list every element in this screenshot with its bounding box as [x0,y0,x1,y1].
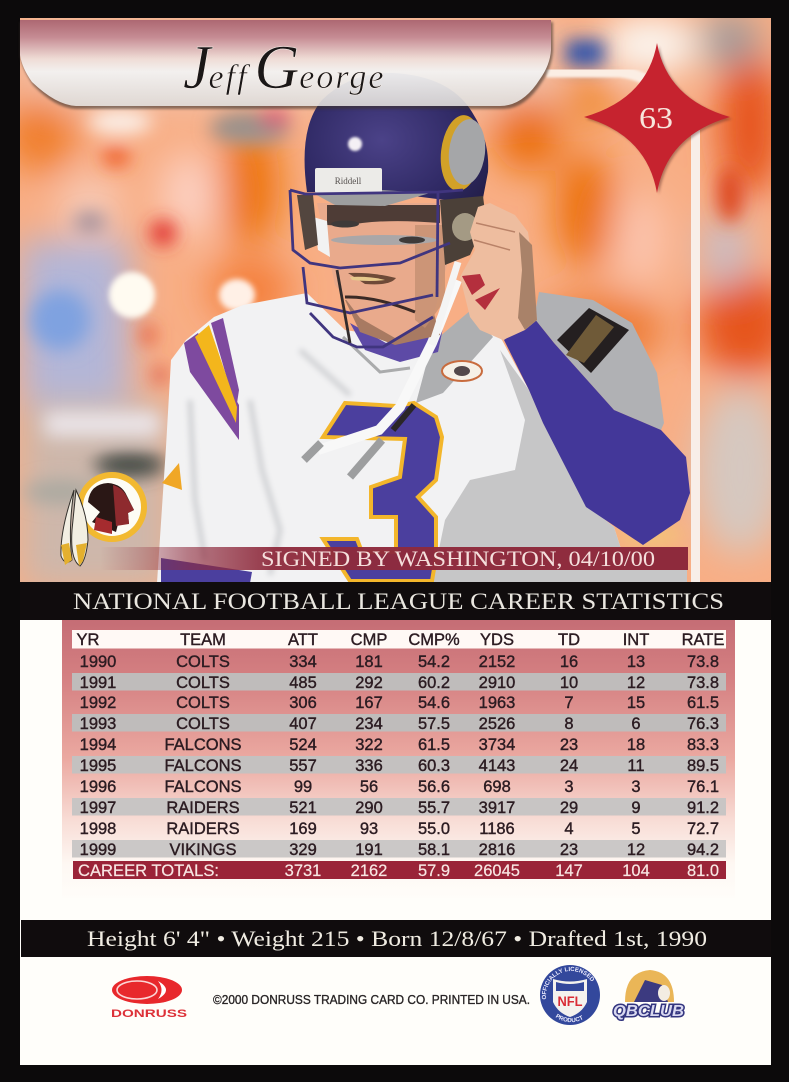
row 1999: 12 [627,841,645,859]
row 1998 [80,820,719,838]
row 1993: 1993 [80,715,116,733]
header band: career statistics: NATIONAL FOOTBALL LEAGUE CAREER STATISTICS [73,589,724,615]
row 1996: FALCONS [164,778,242,796]
row 1991: 60.2 [418,674,450,692]
row 1994: 322 [355,736,383,754]
career totals row: 81.0 [687,862,719,880]
row 1991: 10 [560,674,578,692]
row 1998: 4 [564,820,574,838]
bio band: Height 6' 4" • Weight 215 • Born 12/8/67 • Drafted 1st, 1990 [87,926,707,951]
row 1990: COLTS [176,653,230,671]
table header: TEAM [180,631,226,649]
row 1993: 57.5 [418,715,450,733]
left shoulder stripes [184,333,239,440]
row 1996: 3 [564,778,574,796]
table header: TD [558,631,580,649]
row 1999: 191 [355,841,383,859]
row 1996: 56.6 [418,778,450,796]
row 1993: 76.3 [687,715,719,733]
row 1997: 290 [355,799,383,817]
sleeve stripes, right [557,308,629,373]
row 1994: FALCONS [164,736,242,754]
row 1993: 8 [564,715,574,733]
jersey shaded side [432,350,687,583]
row 1990: 54.2 [418,653,450,671]
row 1995 [72,756,726,775]
row 1990: 16 [560,653,578,671]
row 1997: 29 [560,799,578,817]
row 1996: 3 [631,778,641,796]
row 1991: 292 [355,674,383,692]
row 1996: 99 [294,778,312,796]
row 1990: 13 [627,653,645,671]
row 1994: 524 [289,736,317,754]
table header: ATT [288,631,318,649]
header band: career statistics [20,582,771,620]
face [317,203,447,338]
row 1994: 18 [627,736,645,754]
row 1991: 73.8 [687,674,719,692]
career totals row: 26045 [474,862,520,880]
career totals row: 57.9 [418,862,450,880]
row 1999: 1999 [80,841,116,859]
helmet ear disc [440,115,474,190]
row 1992: 61.5 [687,694,719,712]
row 1995: 557 [289,757,317,775]
row 1997: 91.2 [687,799,719,817]
table header: CMP% [408,631,460,649]
row 1994: 83.3 [687,736,719,754]
row 1996: 1996 [80,778,116,796]
Donruss logo: DONRUSS [111,1008,187,1020]
row 1997: 9 [631,799,641,817]
row 1994: 61.5 [418,736,450,754]
player illustration [157,73,690,583]
row 1991: COLTS [176,674,230,692]
career totals row: 2162 [351,862,387,880]
row 1996: 56 [360,778,378,796]
neck [345,300,440,345]
row 1999: 329 [289,841,317,859]
row 1991: 485 [289,674,317,692]
row 1991: 12 [627,674,645,692]
row 1994: 1994 [80,736,116,754]
jersey torso [157,293,620,582]
face mask [290,190,463,347]
career totals row: 3731 [285,862,321,880]
row 1993: 234 [355,715,383,733]
row 1992 [80,694,719,712]
row 1998: 1998 [80,820,116,838]
row 1992: 306 [289,694,317,712]
row 1998: 93 [360,820,378,838]
row 1991 [72,673,726,692]
row 1997: 55.7 [418,799,450,817]
row 1999: 94.2 [687,841,719,859]
row 1992: 1963 [479,694,515,712]
row 1996 [80,778,719,796]
photo: blurred stadium crowd background [4,14,789,590]
row 1995: 4143 [479,757,515,775]
hand [460,203,537,340]
row 1999: VIKINGS [170,841,236,859]
career totals row [73,861,726,880]
NFL licensed product badge: NFL [558,993,583,1009]
career totals row: CAREER TOTALS: [78,862,219,880]
row 1997: 521 [289,799,317,817]
row 1999: 2816 [479,841,515,859]
collar strap [432,262,458,345]
QB Club logo: QBCLUB [613,1003,684,1020]
red banner: signed by [100,546,688,571]
feathers [72,490,88,566]
row 1998: RAIDERS [166,820,240,838]
row 1992: 7 [564,694,574,712]
row 1992: 1992 [80,694,116,712]
row 1992: 15 [627,694,645,712]
row 1993 [72,714,726,733]
row 1992: COLTS [176,694,230,712]
row 1992: 167 [355,694,383,712]
card number star [584,43,732,194]
row 1995: 1995 [80,757,116,775]
card number star: 63 [639,100,673,135]
table header: CMP [351,631,387,649]
red banner: signed by: SIGNED BY WASHINGTON, 04/10/00 [261,546,655,571]
jersey folds [190,350,350,575]
NFL licensed product badge [540,965,600,1025]
statistics table [62,620,735,898]
NFL licensed product badge: OFFICIALLY LICENSED [542,966,594,1000]
jersey number 3 [323,403,442,581]
row 1995: 11 [627,757,645,775]
purple compression sleeve [504,318,690,545]
row 1994 [80,736,719,754]
row 1998: 1186 [479,820,515,838]
Donruss logo [111,976,187,1020]
row 1995: 89.5 [687,757,719,775]
row 1995: 24 [560,757,578,775]
row 1996: 76.1 [687,778,719,796]
table header: YR [77,631,100,649]
row 1990: 2152 [479,653,515,671]
row 1990: 334 [289,653,317,671]
team patch on chest [442,361,482,381]
row 1993: 2526 [479,715,515,733]
row 1993: 6 [631,715,641,733]
row 1994: 23 [560,736,578,754]
table header: RATE [682,631,724,649]
row 1998: 72.7 [687,820,719,838]
NFL licensed product badge: PRODUCT [556,1014,582,1022]
player illustration: Riddell [335,176,362,186]
row 1999: 23 [560,841,578,859]
white draw string [334,280,462,440]
row 1995: FALCONS [164,757,242,775]
row 1994: 3734 [479,736,515,754]
helmet [304,73,488,200]
row 1997: 1997 [80,799,116,817]
row 1990: 1990 [80,653,116,671]
bio band [21,920,771,957]
collar [350,323,443,362]
photo: bright highlight spots [109,272,255,318]
row 1997: RAIDERS [166,799,240,817]
team logo: Washington [61,472,147,566]
photo: white goal post [546,72,700,583]
table header: INT [623,631,649,649]
row 1995: 60.3 [418,757,450,775]
grey shoulder [534,292,664,430]
name plate [20,20,553,109]
career totals row: 104 [622,862,650,880]
dark hair and strap [440,196,486,265]
copyright line: ©2000 DONRUSS TRADING CARD CO. PRINTED IN USA. [213,993,530,1007]
row 1991: 2910 [479,674,515,692]
table panel gradient [62,620,735,898]
row 1993: 407 [289,715,317,733]
row 1999: 58.1 [418,841,450,859]
purple lower left [161,558,252,583]
row 1998: 5 [631,820,641,838]
career totals row: 147 [555,862,583,880]
row 1997: 3917 [479,799,515,817]
player name script: JeffGeorge [183,34,385,102]
row 1998: 55.0 [418,820,450,838]
row 1995: 336 [355,757,383,775]
row 1990: 181 [355,653,383,671]
row 1997 [72,798,726,817]
row 1999 [72,840,726,859]
row 1990: 73.8 [687,653,719,671]
QB Club logo [613,970,684,1020]
left sleeve patch [162,463,182,490]
table header: YDS [480,631,514,649]
row 1998: 169 [289,820,317,838]
chest shadow [416,310,493,403]
row 1991: 1991 [80,674,116,692]
row 1990 [80,653,719,671]
row 1992: 54.6 [418,694,450,712]
row 1993: COLTS [176,715,230,733]
row 1996: 698 [483,778,511,796]
table header [72,630,726,649]
helmet brim and Riddell plate [313,190,430,206]
